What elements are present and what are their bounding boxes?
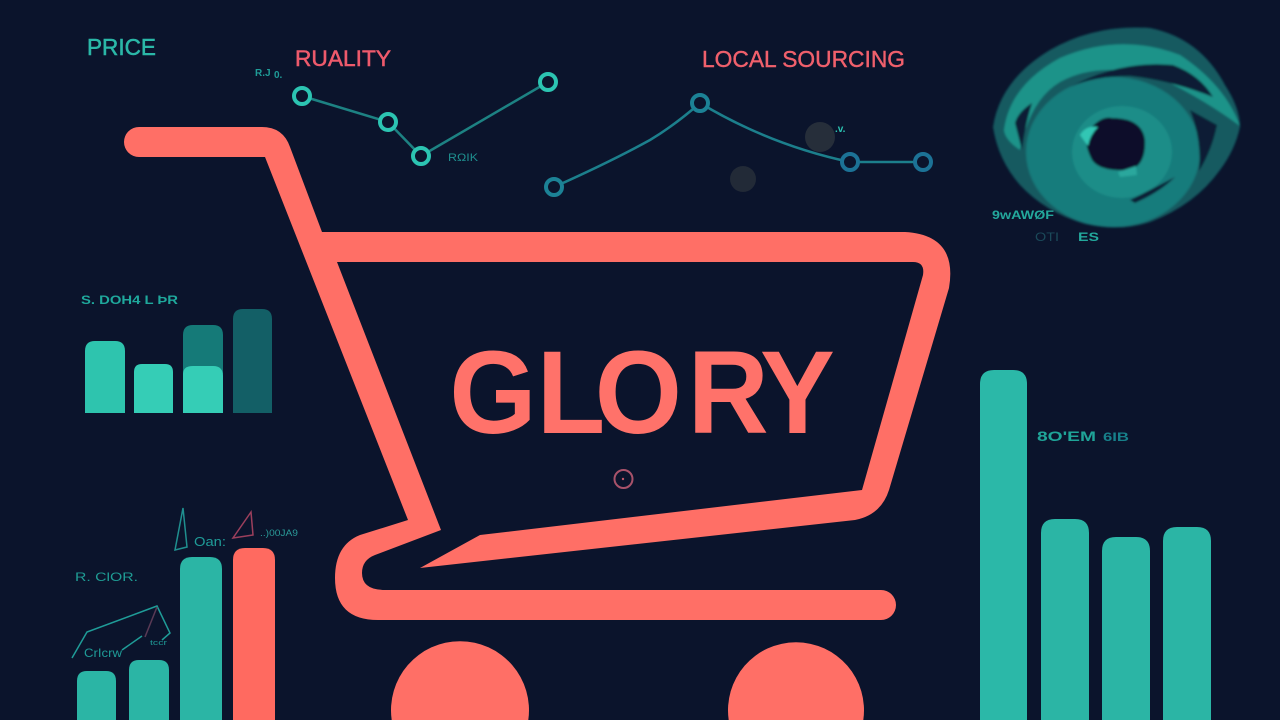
spiral caption: ES (1078, 230, 1099, 244)
line chart: quality: RΩIK (448, 152, 479, 164)
icon: teal spiral (993, 27, 1240, 228)
line chart: quality: R.J (255, 68, 271, 79)
bar chart: right: 6IB (1103, 430, 1129, 444)
bar chart: bottom left: R. ClOR. (75, 570, 138, 584)
spiral caption (992, 208, 1099, 244)
spiral caption: 9wAWØF (992, 208, 1054, 222)
line chart: quality (255, 68, 556, 164)
bar chart: bottom left: CrIcrw (84, 646, 122, 660)
bar chart: right: 8O'EM (1037, 428, 1096, 444)
icon: shopping cart (124, 127, 950, 720)
bar chart: bottom left: tccr (150, 640, 168, 647)
bar chart: middle left: S. DOH4 L ÞR (81, 293, 178, 307)
icon: small target (614, 470, 632, 488)
cart title: GLORY (449, 327, 835, 459)
bar chart: bottom left: ..)00JA9 (260, 528, 298, 538)
spiral caption: OTI (1035, 230, 1059, 244)
cart wheel: right (728, 642, 864, 720)
line chart: quality: 0. (274, 70, 283, 81)
heading: local sourcing: LOCAL SOURCING (702, 46, 905, 72)
heading: quality: RUALITY (295, 46, 391, 71)
line chart: local sourcing: .v. (835, 124, 846, 135)
line chart: local sourcing (546, 95, 931, 195)
cart wheel: left (391, 641, 529, 720)
heading: price: PRICE (87, 34, 156, 60)
bar chart: right (980, 370, 1211, 720)
bar chart: bottom left: Oan: (194, 534, 226, 549)
bar chart: middle left (81, 293, 272, 413)
bar chart: bottom left (72, 508, 298, 720)
